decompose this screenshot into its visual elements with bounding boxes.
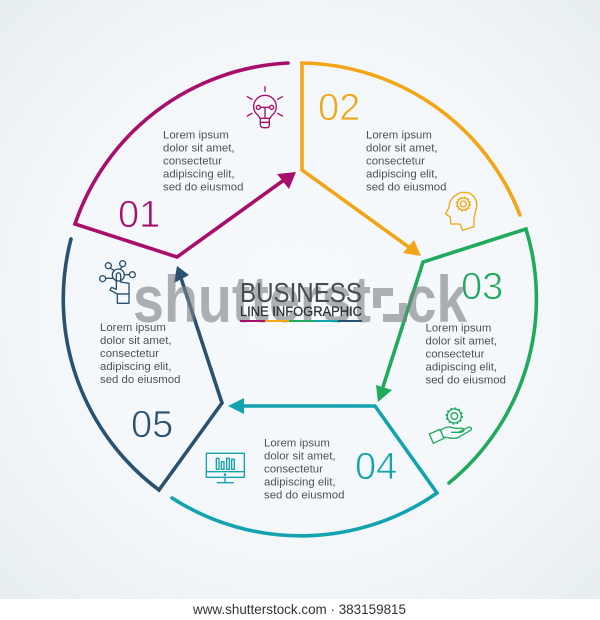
step 02 text: consectetur: [366, 156, 425, 168]
step 01 text: consectetur: [163, 156, 222, 168]
step 01 outline and arrow: [75, 63, 296, 257]
step 04 text: adipiscing elit,: [264, 476, 336, 488]
step 05 text: consectetur: [100, 348, 159, 360]
title line 1: BUSINESS: [240, 277, 362, 308]
panel: step 02: [302, 63, 520, 256]
step 02 text: Lorem ipsum: [366, 130, 432, 142]
center title: [240, 277, 362, 322]
title line 2: LINE INFOGRAPHIC: [240, 303, 362, 319]
step 04 number: 04: [355, 446, 397, 488]
step 03 text: consectetur: [426, 348, 485, 360]
panel: step 05: [63, 239, 222, 490]
step 05 text: dolor sit amet,: [100, 335, 172, 347]
step 02 number: 02: [318, 87, 360, 129]
step 02 text: adipiscing elit,: [366, 168, 438, 180]
step 04 text: consectetur: [264, 464, 323, 476]
icon: light bulb: [247, 87, 282, 128]
step 01 text: Lorem ipsum: [163, 130, 229, 142]
watermark: ck: [406, 262, 467, 336]
step 05 outline and arrow: [63, 239, 222, 490]
footer credit: www.shutterstock.com · 383159815: [192, 601, 406, 617]
step 05 text: Lorem ipsum: [100, 322, 166, 334]
step 04 outline and arrow: [172, 398, 437, 536]
step 02 text: sed do eiusmod: [366, 182, 446, 194]
step 01 number: 01: [118, 194, 160, 236]
watermark: shutterst: [133, 262, 371, 336]
step 01 text: adipiscing elit,: [163, 168, 235, 180]
step 05 text: adipiscing elit,: [100, 361, 172, 373]
panel: step 03: [376, 229, 536, 483]
panel: step 01: [75, 63, 296, 257]
step 03 outline and arrow: [376, 229, 536, 483]
step 03 text: adipiscing elit,: [426, 362, 497, 374]
step 03 number: 03: [461, 266, 503, 308]
step 05 text: sed do eiusmod: [100, 374, 180, 386]
step 04 text: Lorem ipsum: [264, 438, 330, 450]
panel: step 04: [172, 398, 437, 536]
step 01 text: dolor sit amet,: [163, 142, 235, 154]
step 02 outline and arrow: [302, 63, 520, 256]
title colour bar: [240, 320, 362, 322]
step 03 text: sed do eiusmod: [426, 374, 506, 386]
step 01 text: sed do eiusmod: [163, 182, 243, 194]
step 04 text: sed do eiusmod: [264, 490, 344, 502]
step 03 text: Lorem ipsum: [426, 322, 491, 334]
icon: hand touching network: [100, 261, 135, 303]
step 05 number: 05: [131, 404, 173, 446]
icon: monitor with bar chart: [206, 453, 244, 483]
step 03 text: dolor sit amet,: [426, 336, 497, 348]
icon: head with gear: [446, 192, 477, 230]
step 04 text: dolor sit amet,: [264, 450, 336, 462]
step 02 text: dolor sit amet,: [366, 142, 438, 154]
icon: hand holding gear: [429, 408, 471, 443]
